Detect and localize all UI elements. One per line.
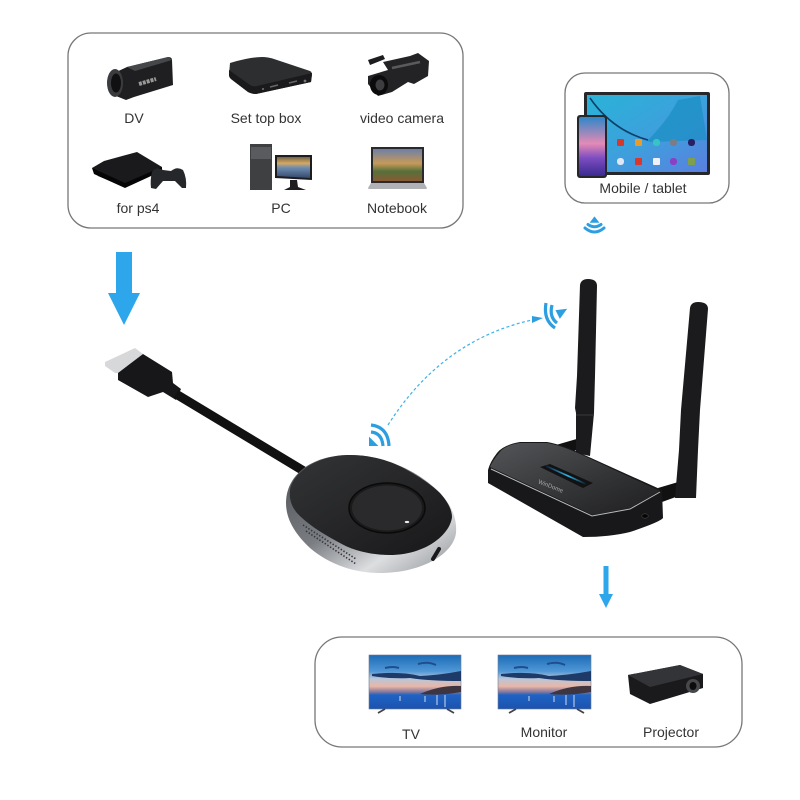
icon: wifi signal at receiver xyxy=(545,303,565,328)
icon: wifi signal at dongle xyxy=(370,425,389,446)
dongle body xyxy=(286,455,456,573)
label: Monitor: Monitor xyxy=(521,724,568,740)
LED slot xyxy=(540,464,593,488)
panel: source devices xyxy=(68,33,463,228)
speaker holes xyxy=(303,525,356,559)
HDMI plug metal xyxy=(105,348,143,373)
antenna right xyxy=(658,302,708,502)
icon: desktop PC xyxy=(250,144,312,190)
antenna left xyxy=(556,279,597,456)
icon: wifi waves below tablet xyxy=(585,218,604,232)
brand text: WinDome xyxy=(537,479,564,495)
highlight edge xyxy=(491,469,660,516)
LED xyxy=(405,521,409,523)
icon: projector xyxy=(628,665,703,704)
control button xyxy=(349,483,425,533)
arrow: big blue arrow down xyxy=(108,252,140,325)
power port xyxy=(642,514,648,518)
panel: display devices xyxy=(315,637,742,747)
label: PC: PC xyxy=(271,200,291,216)
label: DV: DV xyxy=(124,110,144,126)
icon: set top box xyxy=(229,57,312,94)
label: Mobile / tablet: Mobile / tablet xyxy=(599,180,687,196)
panel: mobile and tablet xyxy=(565,73,729,203)
icon: phone xyxy=(577,115,607,178)
label: video camera: video camera xyxy=(360,110,444,126)
icon: monitor xyxy=(498,655,591,713)
icon: video camera xyxy=(368,53,429,96)
label: Set top box: Set top box xyxy=(231,110,301,126)
icon: game console xyxy=(92,152,186,189)
icon: TV xyxy=(369,655,461,713)
USB port xyxy=(433,549,439,559)
HDMI plug housing xyxy=(118,354,181,400)
label: Projector: Projector xyxy=(643,724,699,740)
receiver body xyxy=(488,442,663,537)
icon: DV camcorder xyxy=(107,57,173,100)
receiver top surface xyxy=(490,443,660,515)
label: Notebook: Notebook xyxy=(367,200,428,216)
arrow: small blue arrow down xyxy=(599,566,613,608)
LED glow xyxy=(546,466,586,484)
receiver with antennas xyxy=(488,279,708,537)
icon: tablet xyxy=(584,92,710,175)
icon: notebook xyxy=(368,147,427,189)
label: for ps4: for ps4 xyxy=(117,200,160,216)
arrow: dotted wireless link xyxy=(388,316,543,425)
transmitter dongle xyxy=(105,348,456,573)
cable xyxy=(176,394,312,476)
label: TV: TV xyxy=(402,726,421,742)
